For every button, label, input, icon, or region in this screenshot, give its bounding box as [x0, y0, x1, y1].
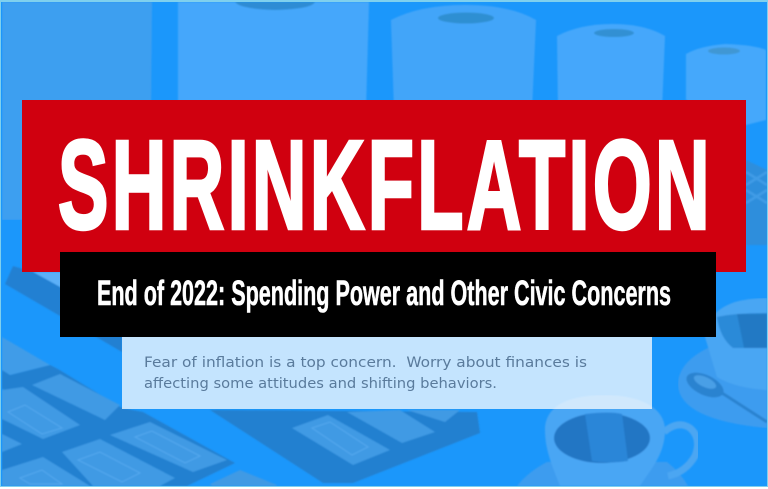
- background photo: chocolate bars: [2, 160, 767, 486]
- background photo: coffee cup with saucer: [517, 395, 698, 486]
- background photo: toilet paper rolls: [2, 2, 766, 220]
- panel: black subtitle banner: [60, 252, 716, 337]
- background photo: coffee cup with spoon: [678, 298, 767, 428]
- description text: affecting some attitudes and shifting behaviors.: [144, 376, 497, 392]
- title: SHRINKFLATION: [58, 116, 710, 256]
- panel: description: [122, 337, 652, 409]
- description text: Fear of inflation is a top concern. Worry about finances is: [144, 355, 587, 371]
